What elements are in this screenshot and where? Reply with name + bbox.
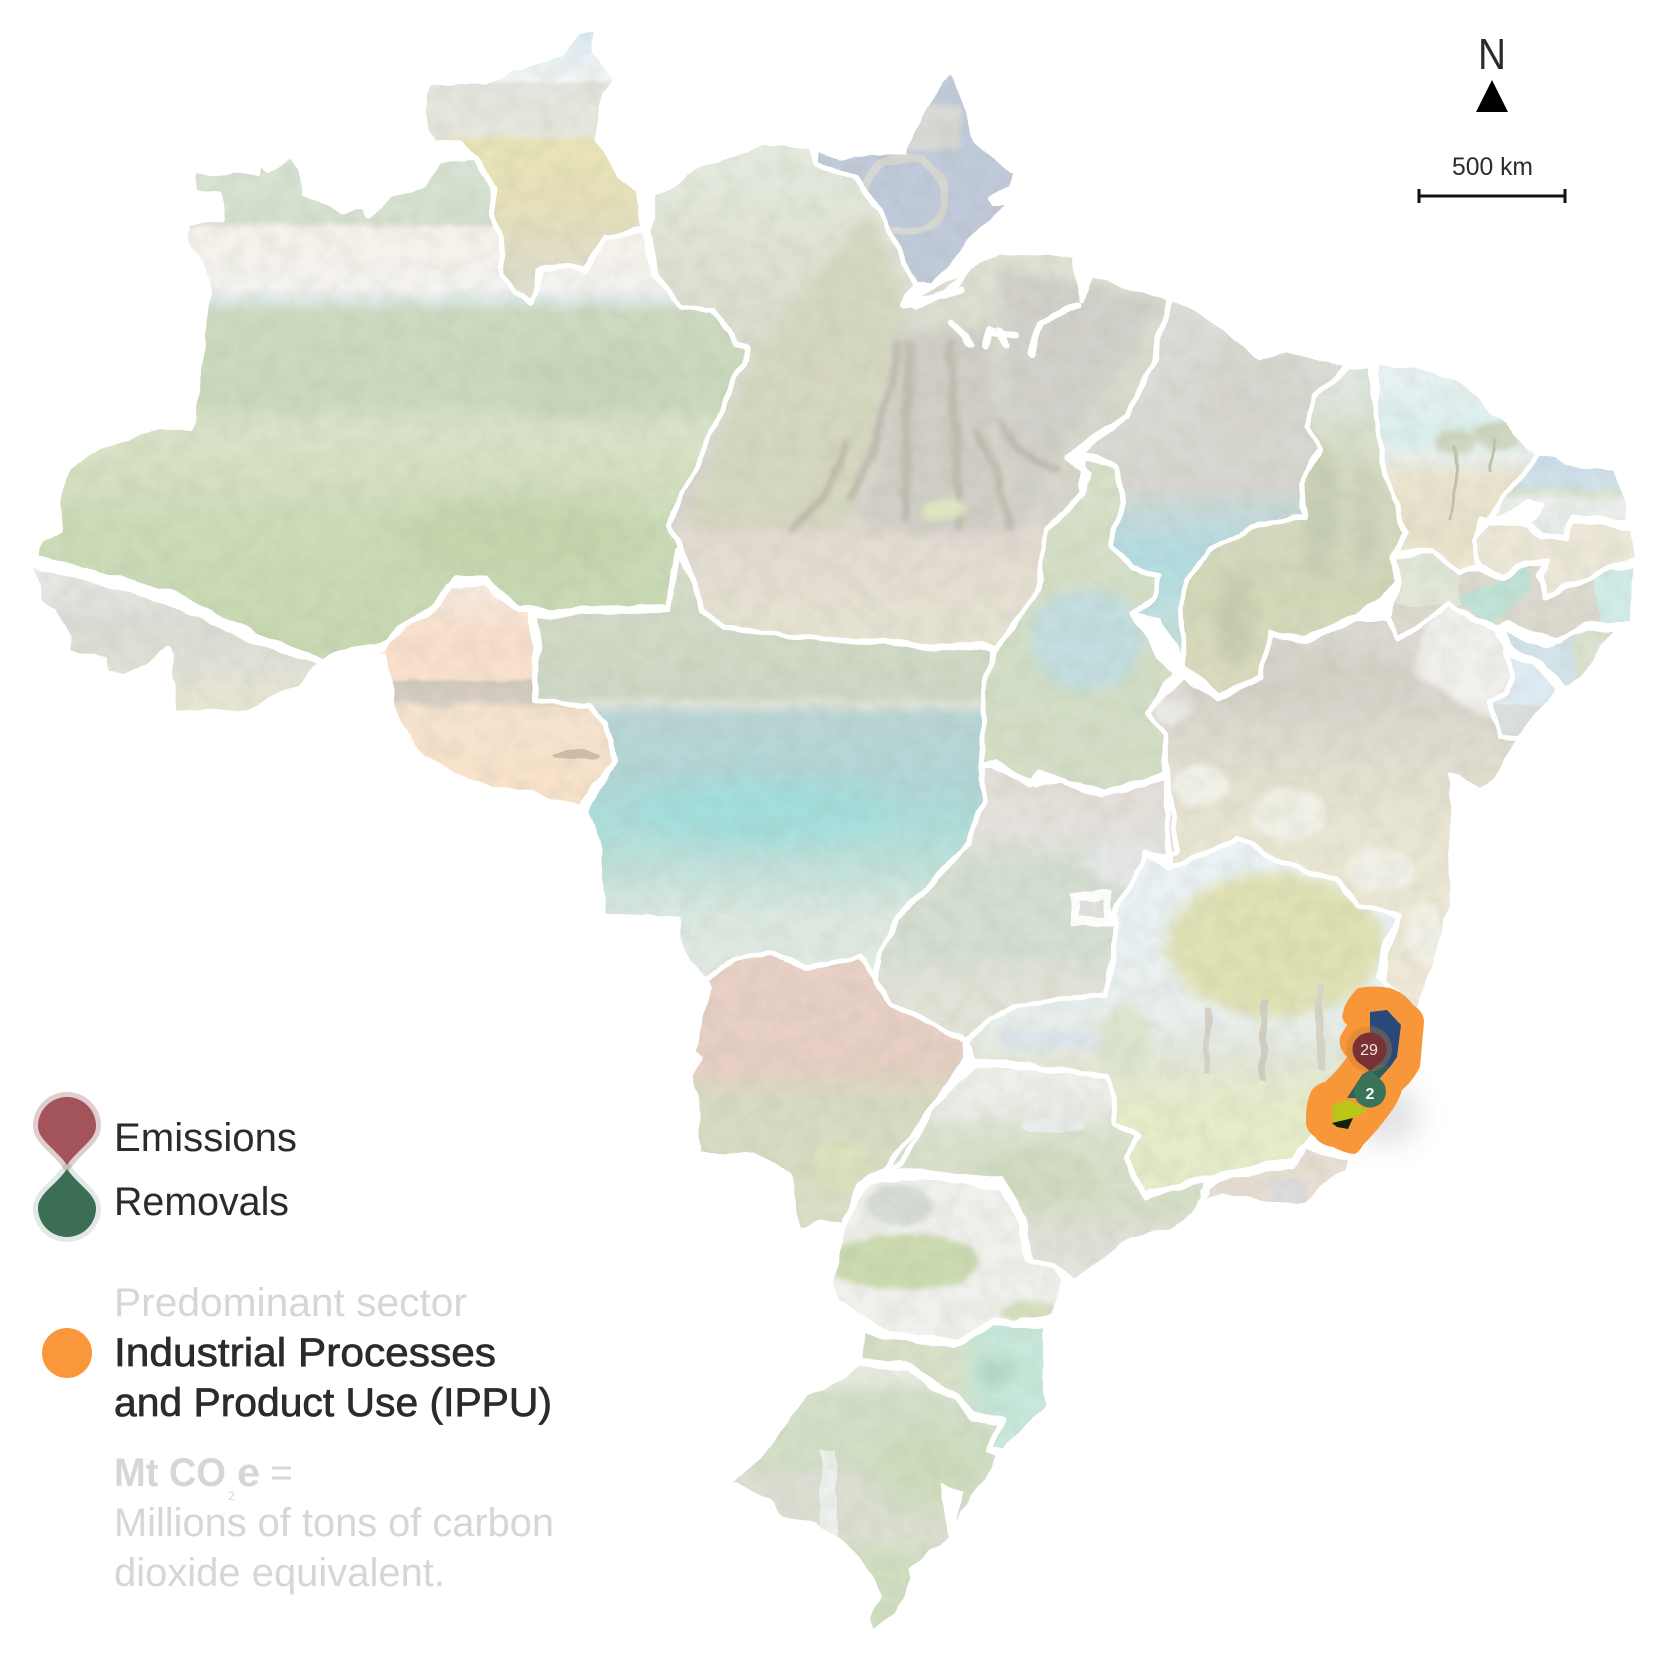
legend: removals drop	[38, 1169, 96, 1237]
state: Alagoas	[1506, 630, 1614, 686]
legend: emissions label: Emissions	[114, 1116, 297, 1160]
state: Para	[648, 143, 1171, 650]
legend: sector name: and Product Use (IPPU)	[114, 1381, 552, 1425]
state: Sergipe	[1492, 658, 1556, 736]
yellow-green region	[1332, 1100, 1368, 1123]
legend: unit definition: Millions of tons of carbon	[114, 1501, 554, 1545]
legend	[38, 1097, 554, 1595]
state: Tocantins	[982, 458, 1176, 797]
pin: emissions 29: 29	[1360, 1042, 1378, 1059]
state: Amazonas	[36, 156, 750, 661]
black region	[1332, 1118, 1353, 1129]
state: Mato Grosso do Sul	[690, 952, 965, 1231]
state: Ceara	[1375, 364, 1538, 573]
state: Minas Gerais	[967, 838, 1400, 1196]
pin: removals 2	[1354, 1070, 1386, 1108]
state: Rondonia	[376, 584, 612, 804]
state: Parana	[829, 1177, 1065, 1342]
state: Goias	[878, 762, 1176, 1041]
state: Roraima	[423, 30, 642, 304]
state: Bahia	[1148, 605, 1519, 1013]
scale bar	[1419, 153, 1565, 203]
state: Acre	[28, 564, 321, 713]
state: Maranhao	[1082, 300, 1348, 667]
blue region	[1370, 1010, 1401, 1067]
N label: N	[1478, 30, 1506, 79]
legend: orange dot	[42, 1328, 92, 1378]
pin: removals 2: 2	[1366, 1086, 1375, 1103]
state: Piaui	[1179, 366, 1407, 695]
state: Santa Catarina	[859, 1323, 1046, 1453]
pin: emissions 29	[1346, 1026, 1392, 1072]
legend: sector name: Industrial Processes	[114, 1331, 496, 1375]
legend: unit definition	[114, 1451, 554, 1595]
state: Mato Grosso	[536, 548, 994, 979]
state: Rio Grande do Norte	[1496, 456, 1626, 535]
shadow	[1350, 1085, 1420, 1145]
state: Rio de Janeiro	[1203, 1147, 1349, 1204]
legend: emissions drop	[38, 1097, 96, 1165]
state: Amapa	[817, 70, 1016, 287]
legend: unit definition: e	[237, 1451, 260, 1495]
scale label: 500 km	[1452, 153, 1533, 181]
legend: unit definition: Mt CO	[114, 1451, 226, 1495]
legend: predominant sector label: Predominant sector	[114, 1281, 467, 1325]
teal region	[1347, 1065, 1390, 1098]
north arrow	[1476, 30, 1508, 112]
icon: Distrito Federal	[1073, 894, 1110, 923]
triangle	[1476, 80, 1508, 112]
state: Paraiba	[1476, 523, 1636, 594]
state: Pernambuco	[1385, 552, 1635, 642]
state: Sao Paulo	[886, 1066, 1206, 1280]
legend: unit definition: 2	[228, 1489, 235, 1503]
legend: removals label: Removals	[114, 1180, 289, 1224]
orange sector blob	[1306, 986, 1424, 1154]
legend: sector name	[114, 1331, 552, 1425]
legend: unit definition: =	[270, 1451, 293, 1495]
legend: unit definition: dioxide equivalent.	[114, 1551, 445, 1595]
state: Rio Grande do Sul	[723, 1364, 1000, 1634]
marker: Espirito Santo highlighted state	[1306, 986, 1424, 1154]
scale line	[1419, 189, 1565, 203]
